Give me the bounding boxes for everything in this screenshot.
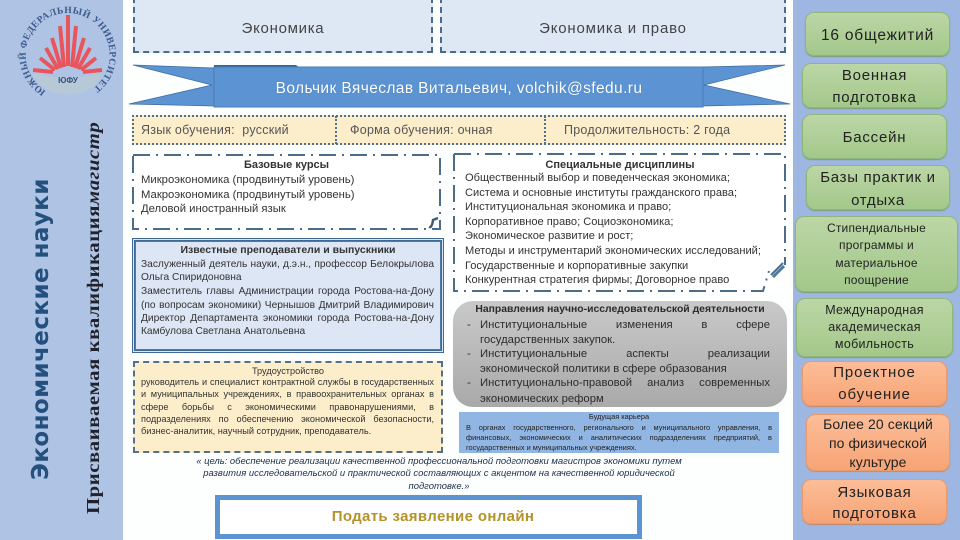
panel: research directions xyxy=(453,301,787,407)
heading: Специальные дисциплины xyxy=(545,159,695,171)
course list: Макроэкономика (продвинутый уровень) xyxy=(141,189,355,201)
tile: language training xyxy=(802,479,947,524)
form: Форма обучения: очная xyxy=(350,123,493,137)
ribbon text: Вольчик Вячеслав Витальевич, volchik@sfedu.ru xyxy=(276,80,642,97)
tile: mobility: мобильность xyxy=(835,337,914,351)
tile: dormitories xyxy=(805,12,950,56)
research list: Институционально-правовой анализ современных xyxy=(480,377,770,389)
tile: military training: подготовка xyxy=(832,88,917,106)
info bar: language, form, duration xyxy=(132,115,786,145)
discipline list: Экономическое развитие и рост; xyxy=(465,230,633,242)
heading: Будущая карьера xyxy=(589,412,649,421)
research list: экономических реформ xyxy=(480,392,604,404)
goal statement: развития исследовательской и практической составляющих с акцентом на качественной юридической xyxy=(203,468,675,479)
left sidebar xyxy=(0,0,123,540)
body lines: Директор Департамента экономики города Ростова-на-Дону xyxy=(141,313,434,324)
discipline list xyxy=(465,172,761,286)
tile: sports sections: культуре xyxy=(849,454,907,470)
body lines: В органах государственного, регионального и муниципального управления, в xyxy=(466,422,772,432)
icon: university logo: ЮЖНЫЙ ФЕДЕРАЛЬНЫЙ УНИВЕРСИТЕТ xyxy=(18,6,116,96)
discipline list: Система и основные институты гражданского права; xyxy=(465,187,737,199)
body lines xyxy=(466,422,772,452)
tile: practice bases: отдыха xyxy=(851,192,905,209)
tile: project learning: Проектное xyxy=(833,364,916,381)
panel frame xyxy=(132,154,441,230)
heading: Направления научно-исследовательской деятельности xyxy=(475,304,765,315)
tile: sports sections: Более 20 секций xyxy=(823,416,933,432)
tile: scholarships: материальное xyxy=(835,256,918,270)
research list xyxy=(480,319,770,404)
ribbon shape xyxy=(128,64,790,108)
research list: Институциональные аспекты реализации xyxy=(480,348,770,360)
tile: scholarships: Стипендиальные xyxy=(827,221,926,235)
box: Экономика и право: Экономика и право xyxy=(539,20,687,37)
body lines: подразделениях по обеспечению экономической безопасности, xyxy=(141,414,434,424)
goal statement: « цель: обеспечение реализации качественной профессиональной подготовки магистров экономики путем xyxy=(196,456,682,467)
body lines: Ольга Спиридоновна xyxy=(141,272,242,283)
body lines: и муниципальных учреждениях, в правоохранительных органах в xyxy=(141,389,434,399)
box: Экономика: Экономика xyxy=(242,20,324,37)
body lines: Камбулова Светлана Анатольевна xyxy=(141,326,305,337)
tile: scholarships: поощрение xyxy=(844,273,909,287)
button: apply online: Подать заявление онлайн xyxy=(332,508,534,525)
research list: Институциональные изменения в сфере xyxy=(480,319,770,331)
discipline list: Корпоративное право; Социоэкономика; xyxy=(465,216,673,228)
button: apply online xyxy=(215,495,642,539)
tile: pool: Бассейн xyxy=(843,129,906,146)
body lines: государственных и муниципальных учреждениях. xyxy=(466,442,637,452)
tile: mobility: академическая xyxy=(828,320,921,334)
language: Язык обучения: русский xyxy=(141,123,289,137)
body lines: сфере борьбы с экономическими правонарушениями, в xyxy=(141,402,434,412)
tile: sports sections: по физической xyxy=(829,435,927,451)
course list: Микроэкономика (продвинутый уровень) xyxy=(141,174,354,186)
course list xyxy=(141,174,355,215)
tile: military training: Военная xyxy=(842,67,907,84)
body lines xyxy=(141,377,434,436)
body lines: финансовых, экономических и аналитических подразделениях предприятий, в xyxy=(466,432,772,442)
discipline list: Методы и инструментарий экономических исследований; xyxy=(465,245,761,257)
vertical heading: field of study: Экономические науки xyxy=(28,178,54,480)
discipline list: Конкурентная стратегия фирмы; Договорное право xyxy=(465,274,729,286)
goal statement xyxy=(196,456,682,492)
tile: language training: Языковая xyxy=(837,484,912,501)
panel: employment xyxy=(133,361,443,453)
ribbon with contact xyxy=(128,64,790,108)
right sidebar xyxy=(793,0,960,540)
heading: Базовые курсы xyxy=(244,159,329,171)
panel: base courses xyxy=(132,154,441,230)
discipline list: Общественный выбор и поведенческая экономика; xyxy=(465,172,730,184)
vertical heading: qualification: Присваиваемая квалификациямагистр xyxy=(83,122,103,514)
body lines xyxy=(141,258,434,337)
body lines: бизнес-аналитик, научный сотрудник, преподаватель. xyxy=(141,426,371,436)
tile: sports sections xyxy=(806,414,950,471)
panel: future career xyxy=(459,412,779,453)
body lines: Заслуженный деятель науки, д.э.н., профессор Белокрылова xyxy=(141,258,434,270)
heading: Известные преподаватели и выпускники xyxy=(180,244,396,256)
tile: language training: подготовка xyxy=(832,505,917,522)
bar separator right xyxy=(544,116,546,144)
bar separator left xyxy=(335,116,337,144)
tile: project learning: обучение xyxy=(838,386,911,403)
discipline list: Институциональная экономика и право; xyxy=(465,201,671,213)
research list: государственных закупок. xyxy=(480,334,615,346)
research list: экономической политики в сфере образования xyxy=(480,362,727,374)
discipline list: Государственные и корпоративные закупки xyxy=(465,260,688,272)
tile: dormitories: 16 общежитий xyxy=(821,27,934,44)
box: Экономика и право xyxy=(440,0,786,53)
body lines: (по вопросам экономики) Чернышов Дмитрий Владимирович xyxy=(141,300,434,311)
dash markers xyxy=(467,319,471,389)
tile: mobility: Международная xyxy=(825,303,924,317)
panel: special disciplines xyxy=(453,153,787,292)
course list: Деловой иностранный язык xyxy=(141,203,286,215)
dash markers: - xyxy=(467,348,471,360)
body lines: руководитель и специалист контрактной службы в государственных xyxy=(141,377,434,387)
tile: scholarships xyxy=(795,216,958,292)
dash markers: - xyxy=(467,319,471,331)
tile: project learning xyxy=(802,361,947,406)
panel: notable teachers and alumni xyxy=(132,238,444,353)
heading: Трудоустройство xyxy=(252,366,324,376)
icon: university logo: ЮФУ xyxy=(58,76,79,85)
panel frame xyxy=(453,153,786,292)
body lines: Заместитель главы Администрации города Ростова-на-Дону xyxy=(141,286,434,297)
duration: Продолжительность: 2 года xyxy=(564,123,730,137)
goal statement: подготовке.» xyxy=(409,481,469,492)
tile: military training xyxy=(802,63,947,108)
tile: pool xyxy=(802,114,947,159)
tile: mobility xyxy=(796,298,953,357)
tile: practice bases: Базы практик и xyxy=(820,169,936,186)
dash markers: - xyxy=(467,377,471,389)
box: Экономика xyxy=(133,0,433,53)
tile: scholarships: программы и xyxy=(839,238,914,252)
tile: practice bases xyxy=(806,165,950,210)
